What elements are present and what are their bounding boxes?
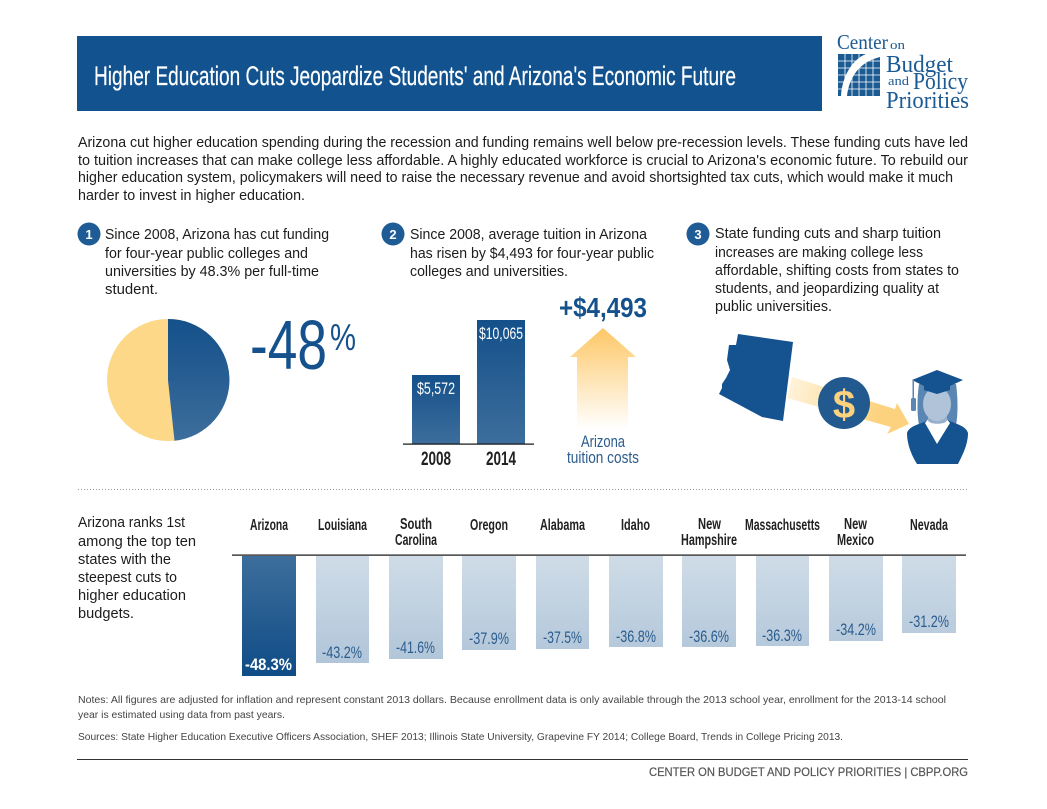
panel 2: tuition xyxy=(382,222,654,470)
title banner xyxy=(77,36,822,111)
number badge 3: 3 xyxy=(694,227,702,242)
sources: Sources: State Higher Education Executive Officers Association, SHEF 2013; Illinois State University, Grapevine FY 2014; College Board, Trends in College Pricing 2013. xyxy=(78,731,843,743)
bar: New Hampshire: New xyxy=(698,516,721,533)
intro paragraph: to tuition increases that can make college less affordable. A highly educated workforce is crucial to Arizona's economic future. To rebuild our xyxy=(78,153,968,169)
ranking text: higher education xyxy=(78,588,186,604)
icon: graduate xyxy=(907,370,968,464)
tuition bar chart: $10,065 xyxy=(479,324,523,343)
bar: Nevada xyxy=(902,517,956,633)
tuition bar chart xyxy=(403,320,534,470)
bar: Massachusetts: Massachusetts xyxy=(745,517,820,534)
panel 1 text xyxy=(105,227,329,298)
arrow label: Arizona xyxy=(581,432,625,451)
arrow: state to student xyxy=(787,377,909,434)
ranking text: states with the xyxy=(78,552,171,568)
bar: Idaho: Idaho xyxy=(621,517,650,534)
panel 3 text: students, and jeopardizing quality at xyxy=(715,281,939,297)
tuition bar chart: $5,572 xyxy=(417,379,455,398)
bar: Alabama xyxy=(536,517,589,649)
bar: New Mexico: Mexico xyxy=(837,532,874,549)
logo: Center on Budget and Policy Priorities xyxy=(837,30,969,114)
bar: Nevada: -31.2% xyxy=(909,612,949,631)
intro paragraph: higher education system, policymakers will need to raise the necessary revenue and avoid shortsighted tax cuts, which would make it much xyxy=(78,170,953,186)
logo: Center on Budget and Policy Priorities: Center xyxy=(837,30,888,54)
bar: Arizona: Arizona xyxy=(250,517,288,534)
intro paragraph: Arizona cut higher education spending during the recession and funding remains well below pre-recession levels. These funding cuts have led xyxy=(78,135,968,151)
bar: Louisiana: -43.2% xyxy=(322,643,362,662)
arrow label: tuition costs xyxy=(567,448,639,467)
intro paragraph xyxy=(78,135,968,204)
panel 1 text: student. xyxy=(105,282,158,298)
panel 2 text: has risen by $4,493 for four-year public xyxy=(410,246,654,262)
bar: Louisiana xyxy=(316,517,369,663)
bar: Alabama: -37.5% xyxy=(543,628,582,647)
ranking text: budgets. xyxy=(78,606,134,622)
number badge 3 xyxy=(686,222,710,246)
bar: Oregon: Oregon xyxy=(470,517,508,534)
tuition bar chart: 2014 xyxy=(486,449,516,470)
panel 2 text: colleges and universities. xyxy=(410,264,568,280)
panel 3 text: increases are making college less xyxy=(715,245,923,261)
ranking text: steepest cuts to xyxy=(78,570,177,586)
number badge 2 xyxy=(382,222,404,246)
icon: dollar coin xyxy=(818,377,870,429)
bar: New Mexico: New xyxy=(844,516,867,533)
intro paragraph: harder to invest in higher education. xyxy=(78,188,305,204)
logo: Center on Budget and Policy Priorities: Policy xyxy=(913,69,968,95)
panel 1: funding cut xyxy=(78,222,356,441)
title: Higher Education Cuts Jeopardize Students' and Arizona's Economic Future xyxy=(94,61,736,91)
footer credit: CENTER ON BUDGET AND POLICY PRIORITIES | CBPP.ORG xyxy=(649,765,968,779)
arrow label xyxy=(567,432,639,467)
logo: Center on Budget and Policy Priorities: Budget xyxy=(886,52,953,78)
tuition bar chart: 2008 xyxy=(421,449,451,470)
increase figure +$4,493: +$4,493 xyxy=(559,292,647,323)
panel 3 text xyxy=(715,226,959,315)
bar: South Carolina: Carolina xyxy=(395,532,437,549)
bar: New Hampshire: -36.6% xyxy=(689,627,729,646)
icon: Arizona map xyxy=(719,334,793,421)
notes: Notes: All figures are adjusted for inflation and represent constant 2013 dollars. Because enrollment data is only available through the 2013 school year, enrollment for the 2013-14 school xyxy=(78,694,946,706)
bar: South Carolina xyxy=(389,516,443,659)
panel 1 text: for four-year public colleges and xyxy=(105,246,308,262)
bar: South Carolina: -41.6% xyxy=(396,638,435,657)
panel 3 text: State funding cuts and sharp tuition xyxy=(715,226,941,242)
bar: South Carolina: South xyxy=(400,516,432,533)
panel 3 text: affordable, shifting costs from states to xyxy=(715,263,959,279)
bar: Louisiana: Louisiana xyxy=(318,517,367,534)
panel 1 text: universities by 48.3% per full-time xyxy=(105,264,319,280)
bar: New Hampshire xyxy=(681,516,737,647)
icon: dollar coin: $ xyxy=(833,383,855,427)
bar: Nevada: Nevada xyxy=(910,517,948,534)
bar: Idaho xyxy=(609,517,663,647)
bar: Alabama: Alabama xyxy=(540,517,585,534)
bar: Arizona: -48.3% xyxy=(245,655,292,674)
ranking text: among the top ten xyxy=(78,534,196,550)
bar: Idaho: -36.8% xyxy=(616,627,656,646)
logo: Center on Budget and Policy Priorities: on xyxy=(890,37,906,52)
dotted section divider xyxy=(78,488,968,490)
panel 1 text: Since 2008, Arizona has cut funding xyxy=(105,227,329,243)
big figure -48%: % xyxy=(330,317,356,358)
bar: New Mexico xyxy=(829,516,883,641)
notes xyxy=(78,694,946,721)
bar: New Mexico: -34.2% xyxy=(836,620,876,639)
arrow: rising tuition xyxy=(570,328,636,434)
notes: year is estimated using data from past years. xyxy=(78,709,285,721)
bar: Massachusetts: -36.3% xyxy=(762,626,802,645)
panel 2 text xyxy=(410,227,654,280)
ranking text xyxy=(78,515,196,622)
number badge 1 xyxy=(78,222,100,246)
bar: Oregon xyxy=(462,517,516,650)
logo: Center on Budget and Policy Priorities: and xyxy=(888,73,910,88)
number badge 1: 1 xyxy=(85,227,93,242)
panel 3: cost shift xyxy=(686,222,968,464)
ranking text: Arizona ranks 1st xyxy=(78,515,185,531)
number badge 2: 2 xyxy=(389,227,397,242)
panel 3 text: public universities. xyxy=(715,299,832,315)
logo: Center on Budget and Policy Priorities: Priorities xyxy=(886,88,969,114)
bar: Massachusetts xyxy=(745,517,820,646)
state ranking bar chart xyxy=(232,516,966,676)
bar: Oregon: -37.9% xyxy=(469,629,509,648)
panel 2 text: Since 2008, average tuition in Arizona xyxy=(410,227,648,243)
big figure -48%: -48 xyxy=(250,306,327,384)
bar: New Hampshire: Hampshire xyxy=(681,532,737,549)
pie chart xyxy=(107,319,229,441)
bar: Arizona xyxy=(242,517,296,676)
